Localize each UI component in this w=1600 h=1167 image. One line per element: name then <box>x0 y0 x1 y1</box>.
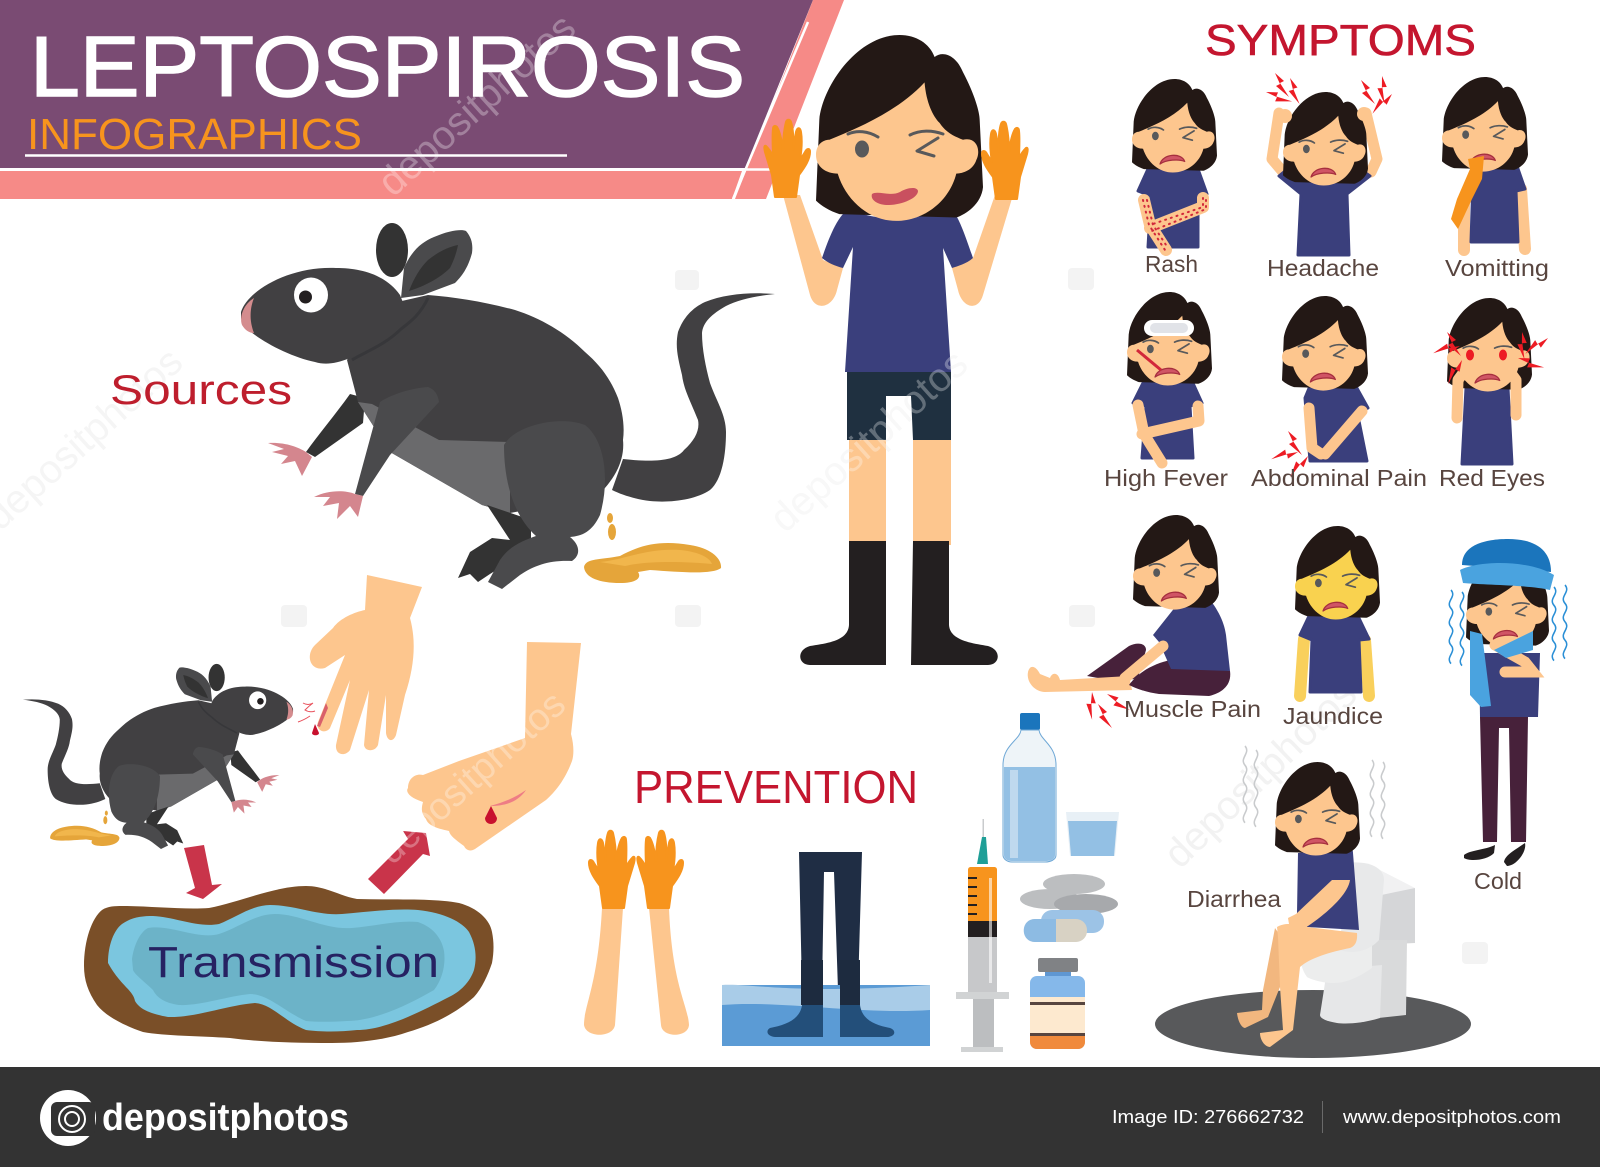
prevention: syringe <box>956 819 1009 1052</box>
label: Jaundice <box>1283 703 1383 729</box>
banner: pink stripes <box>0 0 844 199</box>
symptom: jaundice <box>1283 526 1383 729</box>
shorts <box>847 372 951 440</box>
shirt <box>822 203 973 372</box>
symptom: abdominal pain <box>1251 296 1427 491</box>
small rat <box>23 664 293 849</box>
title: LEPTOSPIROSIS <box>30 20 745 115</box>
label: Vomitting <box>1445 255 1549 281</box>
prevention: gloves and arms <box>584 831 689 1035</box>
footer: brand name: depositphotos <box>102 1097 349 1139</box>
hand with scratch <box>298 575 422 754</box>
symptom: vomiting <box>1442 77 1549 281</box>
label: transmission: Transmission <box>148 938 439 987</box>
symptom: cold <box>1449 539 1567 894</box>
footer: camera logo <box>40 1090 96 1146</box>
symptom: diarrhea <box>1155 746 1471 1058</box>
prevention: pills and capsules <box>1020 874 1118 942</box>
footer: image id: Image ID: 276662732 <box>1112 1107 1304 1127</box>
title banner <box>0 0 844 205</box>
hand with cut <box>407 642 581 850</box>
arrow: pond to hand <box>368 831 430 894</box>
head <box>816 35 983 221</box>
illustration: transmission cycle <box>23 575 581 899</box>
gloves <box>764 120 810 197</box>
arrow: rat to pond <box>184 845 222 899</box>
label: Cold <box>1474 868 1522 894</box>
heading: prevention: PREVENTION <box>634 761 918 813</box>
prevention: boots in floodwater <box>722 852 930 1046</box>
symptom: headache <box>1266 73 1396 281</box>
illustration: large rat with urine <box>241 223 775 589</box>
heading: symptoms: SYMPTOMS <box>1205 16 1476 65</box>
footer: website: www.depositphotos.com <box>1342 1107 1561 1127</box>
watermark on pond area: depositphotos <box>370 683 574 873</box>
banner: purple panel <box>0 0 813 168</box>
symptom: high fever <box>1104 292 1228 491</box>
prevention: water bottle and glass <box>1003 713 1119 862</box>
watermark: repeated stock text <box>0 268 1488 964</box>
glass <box>1066 812 1119 856</box>
label: Diarrhea <box>1187 886 1281 912</box>
floor mat <box>1155 990 1471 1058</box>
illustration: muddy pond <box>84 683 574 1043</box>
subtitle: INFOGRAPHICS <box>27 110 362 159</box>
legs and arm <box>1237 928 1290 1028</box>
label: Red Eyes <box>1439 465 1545 491</box>
label: Headache <box>1267 255 1379 281</box>
boots <box>800 541 998 665</box>
label: Rash <box>1145 251 1198 277</box>
symptom: red eyes <box>1433 298 1549 491</box>
watermark: repeated stock text: depositphotos <box>762 341 976 541</box>
label: Abdominal Pain <box>1251 465 1427 491</box>
label: High Fever <box>1104 465 1228 491</box>
watermark on woman: depositphotos <box>762 341 976 541</box>
label: Muscle Pain <box>1124 696 1261 722</box>
watermark on banner: depositphotos <box>370 5 584 205</box>
heading: sources: Sources <box>110 366 292 413</box>
legs <box>849 430 951 545</box>
banner: white rules <box>0 22 808 199</box>
illustration: main woman with gloves and boots <box>762 35 1028 665</box>
arms <box>783 195 1013 306</box>
symptom: muscle pain <box>1028 515 1261 728</box>
symptom: rash <box>1132 79 1217 277</box>
watermark: repeated stock text: depositphotos <box>1156 672 1365 876</box>
toilet <box>1300 862 1415 1023</box>
shirt <box>1297 847 1359 930</box>
prevention: medicine vial <box>1030 958 1085 1049</box>
footer bar <box>0 1067 1600 1167</box>
